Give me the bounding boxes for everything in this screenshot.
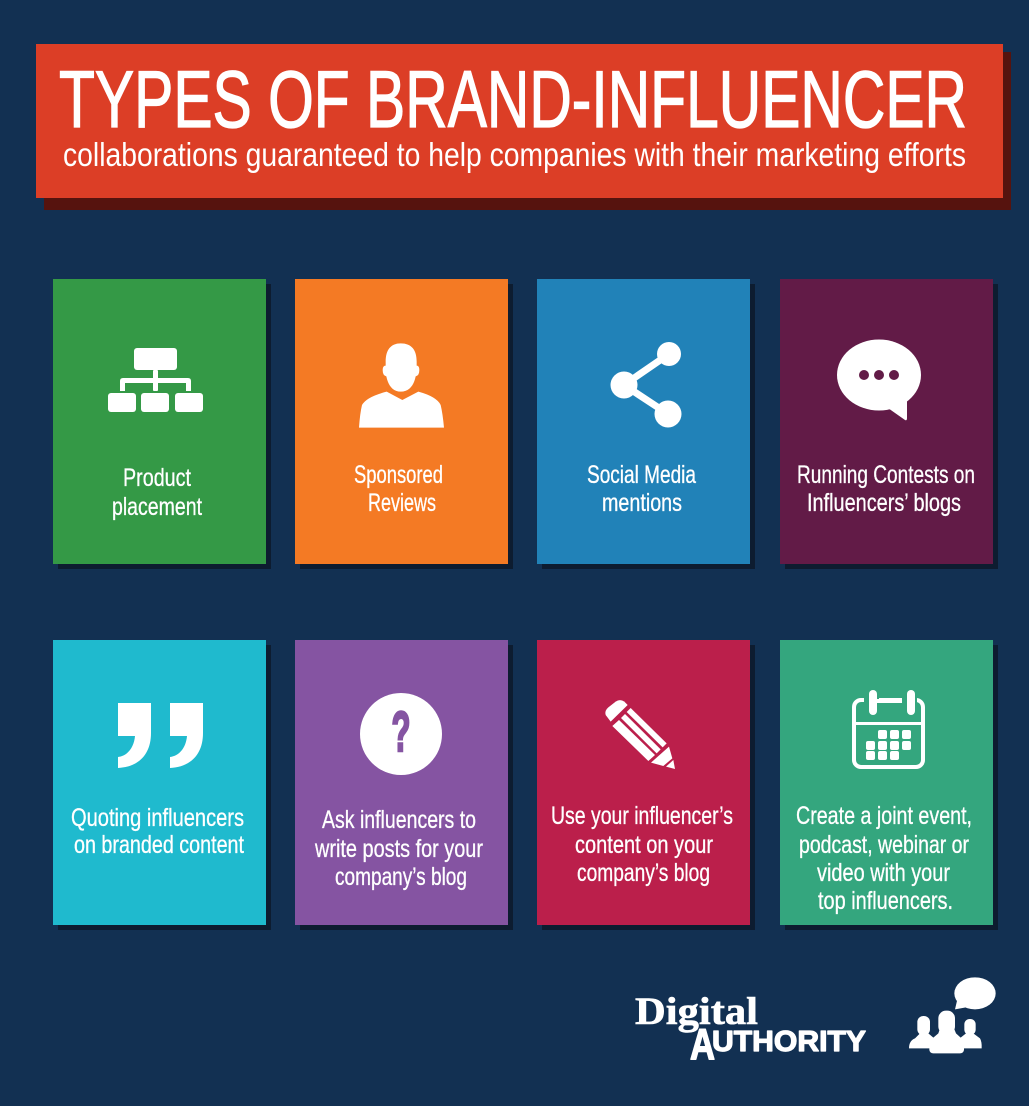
label: Product xyxy=(123,464,191,492)
label: podcast, webinar or xyxy=(799,831,969,859)
label: Quoting influencers xyxy=(71,804,244,832)
header banner xyxy=(36,44,1011,210)
logo: Digital Authority wordmark xyxy=(635,990,866,1069)
label: company’s blog xyxy=(335,863,467,891)
label: write posts for your xyxy=(314,835,483,863)
label: mentions xyxy=(602,489,682,517)
label: Influencers’ blogs xyxy=(807,489,961,517)
panel: social media mentions xyxy=(537,279,755,569)
label xyxy=(587,461,696,517)
label xyxy=(314,806,483,891)
icon: question mark xyxy=(360,693,442,775)
label xyxy=(71,804,244,859)
panel: running contests xyxy=(780,279,998,569)
label: placement xyxy=(112,493,202,521)
logo: Digital Authority wordmark: A xyxy=(690,1020,715,1069)
label: on branded content xyxy=(74,831,244,859)
label xyxy=(354,461,443,517)
panel: product placement xyxy=(53,279,271,569)
icon: person xyxy=(359,343,444,428)
label: Reviews xyxy=(368,489,436,517)
panel: quoting influencers xyxy=(53,640,271,930)
label xyxy=(796,802,972,915)
logo: Digital Authority wordmark: UTHORITY xyxy=(712,1026,866,1058)
label: Ask influencers to xyxy=(322,806,476,834)
label: Create a joint event, xyxy=(796,802,972,830)
label xyxy=(112,464,202,521)
icon: question mark: ? xyxy=(392,700,410,764)
icon: quotation marks xyxy=(118,703,203,768)
label: Running Contests on xyxy=(797,461,975,489)
icon: people with speech bubble xyxy=(909,977,996,1053)
label: video with your xyxy=(817,859,950,887)
logo: Digital Authority wordmark: Digital xyxy=(635,990,758,1033)
panel: sponsored reviews xyxy=(295,279,513,569)
label: Social Media xyxy=(587,461,696,489)
icon: speech bubble xyxy=(837,340,921,420)
label: top influencers. xyxy=(818,887,953,915)
icon: org chart xyxy=(108,348,203,412)
label: content on your xyxy=(575,831,713,859)
label xyxy=(551,802,733,887)
panel: ask influencers xyxy=(295,640,513,930)
panel: use influencer content xyxy=(537,640,755,930)
label: company’s blog xyxy=(577,859,710,887)
label xyxy=(797,461,975,517)
label: Use your influencer’s xyxy=(551,802,733,830)
icon: calendar xyxy=(854,690,923,767)
icon: share xyxy=(610,342,682,428)
label: Sponsored xyxy=(354,461,443,489)
panel: joint event xyxy=(780,640,998,930)
icon: pencil xyxy=(605,700,675,769)
